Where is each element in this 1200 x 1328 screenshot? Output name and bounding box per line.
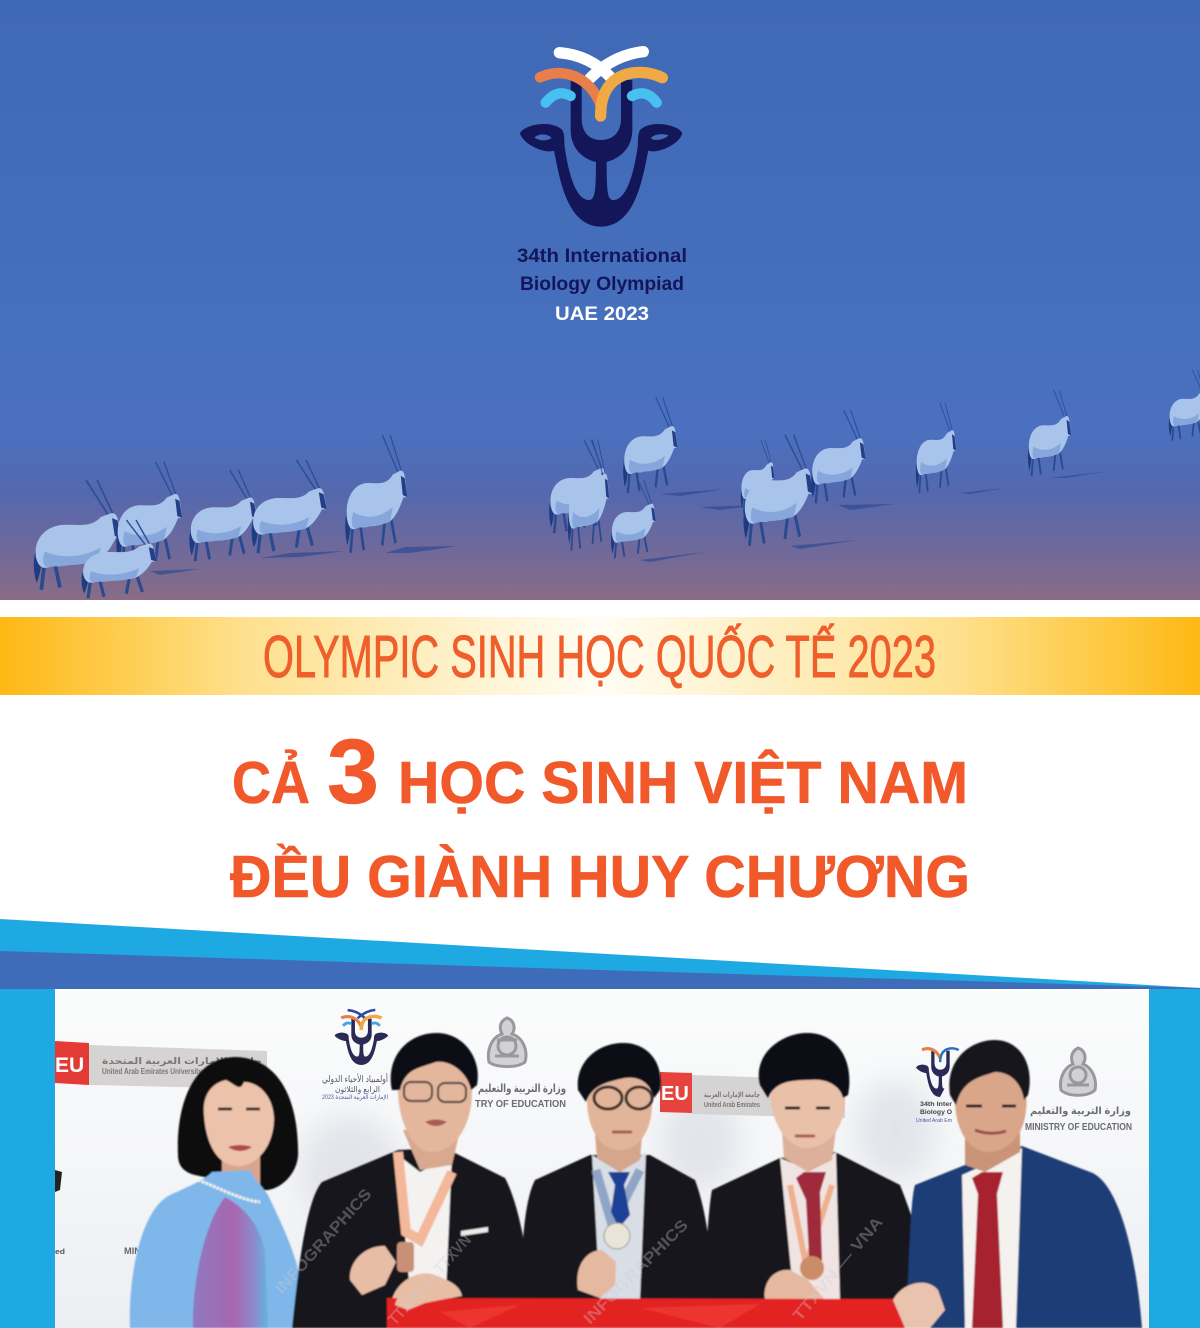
backdrop logos and sponsors [55, 1010, 1132, 1256]
oryx 7 [549, 440, 608, 533]
face [770, 1063, 845, 1148]
shirt [398, 1155, 452, 1292]
hand [764, 1270, 825, 1300]
hair [178, 1057, 298, 1190]
hair [578, 1043, 661, 1102]
backdrop logos and sponsors: MIN [124, 1246, 141, 1256]
neck [782, 1130, 836, 1172]
logo orange arc [540, 73, 601, 105]
pocket square [461, 1227, 488, 1236]
bronze medal [800, 1256, 824, 1280]
person: student 2 [521, 1043, 712, 1328]
suit [905, 1146, 1142, 1328]
side frame [0, 989, 1200, 1328]
left edge fragments [55, 1170, 62, 1192]
watermarks: INFOGRAPHICS [272, 1186, 376, 1298]
logo yellow arc [601, 72, 662, 116]
people group [130, 1033, 1142, 1328]
lanyard [790, 1185, 832, 1265]
backdrop logos and sponsors: TRY OF EDUCATION [475, 1099, 566, 1110]
slanted ribbon [0, 919, 1200, 1000]
shirt [962, 1148, 1022, 1328]
neck [965, 1130, 1020, 1172]
face [204, 1080, 274, 1166]
oryx 11 [741, 440, 775, 514]
UAEU banner center: United Arab Emirates [704, 1102, 760, 1109]
glasses [404, 1082, 466, 1102]
UAEU banner left: جامعة الإمارات العربية المتحدة [102, 1056, 262, 1067]
face [587, 1070, 652, 1150]
logo navy fork [571, 80, 632, 163]
UAEU banner left [55, 1041, 267, 1089]
pearl necklace [198, 1180, 260, 1202]
oryx 13 [811, 410, 866, 503]
oryx 4 [252, 460, 327, 553]
eyes and smile [218, 1108, 260, 1110]
oryx 8 [568, 440, 609, 551]
glasses [594, 1087, 652, 1109]
watermarks: TTXVN — TTXVN [385, 1232, 475, 1328]
dress [130, 1170, 303, 1328]
watermarks: INFOGRAPHICS [581, 1217, 692, 1328]
oryx 9 [611, 480, 656, 558]
headline [230, 721, 970, 910]
UAEU banner left: EU [55, 1054, 84, 1077]
face [955, 1070, 1027, 1152]
suit [702, 1152, 940, 1328]
hero background: desert with oryx herd [0, 0, 1200, 600]
headline: ĐỀU GIÀNH HUY CHƯƠNG [230, 844, 970, 910]
shirt [780, 1152, 840, 1300]
oryx 16 [1169, 370, 1200, 441]
headline: 3 [327, 721, 379, 823]
photo: Vietnamese team at the olympiad [0, 989, 1200, 1328]
oryx 12 [743, 435, 813, 546]
backdrop logos and sponsors: United Arab Em [916, 1118, 952, 1124]
backdrop logos and sponsors: MINISTRY OF EDUCATION [1025, 1122, 1132, 1133]
oryx shadows on the sand [150, 471, 1110, 575]
neck [222, 1150, 260, 1185]
oryx 6 [82, 520, 157, 598]
hair [759, 1033, 849, 1098]
photo backdrop [55, 989, 1149, 1328]
UAEU banner center [660, 1072, 845, 1118]
person: woman in ao dai [130, 1057, 303, 1328]
backdrop logos and sponsors: أولمبياد الأحياء الدولي [322, 1073, 388, 1084]
hand over flag [893, 1283, 945, 1328]
logo light blue arcs [546, 93, 657, 103]
person: student 1 [292, 1033, 532, 1328]
silver medal [604, 1223, 630, 1249]
hair [949, 1040, 1030, 1105]
backdrop logos and sponsors: Biology O [920, 1110, 952, 1116]
Vietnamese flag held by the team [387, 1277, 945, 1328]
lanyard [398, 1152, 452, 1240]
logo caption: Biology Olympiad [520, 274, 684, 295]
mini olympiad logo left [335, 1010, 388, 1065]
medal and hands [350, 1246, 396, 1295]
oryx 10 [623, 397, 678, 493]
oryx 14 [916, 403, 956, 493]
suit [292, 1148, 532, 1328]
eyes and mouth [785, 1106, 830, 1110]
emblem right [1060, 1048, 1096, 1095]
oryx 2 [116, 462, 182, 568]
backdrop logos and sponsors: 2023 الإمارات العربية المتحدة [322, 1094, 388, 1101]
mini olympiad logo right [916, 1048, 959, 1097]
oryx 1 [34, 480, 121, 590]
UAEU banner left: United Arab Emirates University [102, 1067, 202, 1076]
neck [403, 1130, 460, 1170]
backdrop shadows [300, 1080, 935, 1225]
title band [0, 617, 1200, 695]
oryx 15 [1028, 390, 1071, 476]
hand over flag 2 [395, 1277, 460, 1310]
suit [521, 1155, 712, 1328]
headline: CẢ [232, 749, 310, 816]
logo caption: UAE 2023 [555, 304, 649, 325]
tie [796, 1172, 826, 1274]
UAEU banner center: EU [661, 1083, 689, 1105]
backdrop logos and sponsors: وزارة التربية والتعليم [1030, 1106, 1131, 1117]
emblem left [488, 1018, 526, 1066]
logo caption: 34th International [517, 246, 687, 267]
UAEU banner center: جامعة الإمارات العربية [704, 1092, 760, 1099]
neck [595, 1135, 642, 1172]
hand [577, 1250, 616, 1298]
mouth [612, 1130, 632, 1134]
logo white horns [559, 52, 643, 78]
person: man in navy suit [905, 1040, 1142, 1328]
tie [608, 1172, 630, 1228]
hair [391, 1033, 478, 1090]
face [398, 1056, 472, 1152]
backdrop logos and sponsors: وزارة التربية والتعليم [478, 1083, 566, 1095]
oryx 3 [189, 470, 257, 561]
person: student 3 [702, 1033, 940, 1328]
logo navy head and ears [520, 124, 682, 227]
watermarks [272, 1186, 887, 1328]
oryx 5 [345, 435, 407, 553]
shirt [592, 1152, 646, 1300]
backdrop logos and sponsors: 34th Inter [920, 1102, 953, 1108]
backdrop logos and sponsors: الرابع والثلاثون [335, 1085, 380, 1094]
tie [972, 1172, 1003, 1328]
watermarks: TTXVN — VNA [790, 1214, 887, 1325]
mouth [425, 1120, 447, 1126]
backdrop logos and sponsors: ed [55, 1249, 65, 1256]
medal ribbon [596, 1170, 640, 1225]
logo: International Biology Olympiad [520, 52, 682, 227]
logo caption [517, 246, 687, 325]
eyes and mouth [966, 1104, 1016, 1108]
headline: HỌC SINH VIỆT NAM [398, 749, 968, 816]
